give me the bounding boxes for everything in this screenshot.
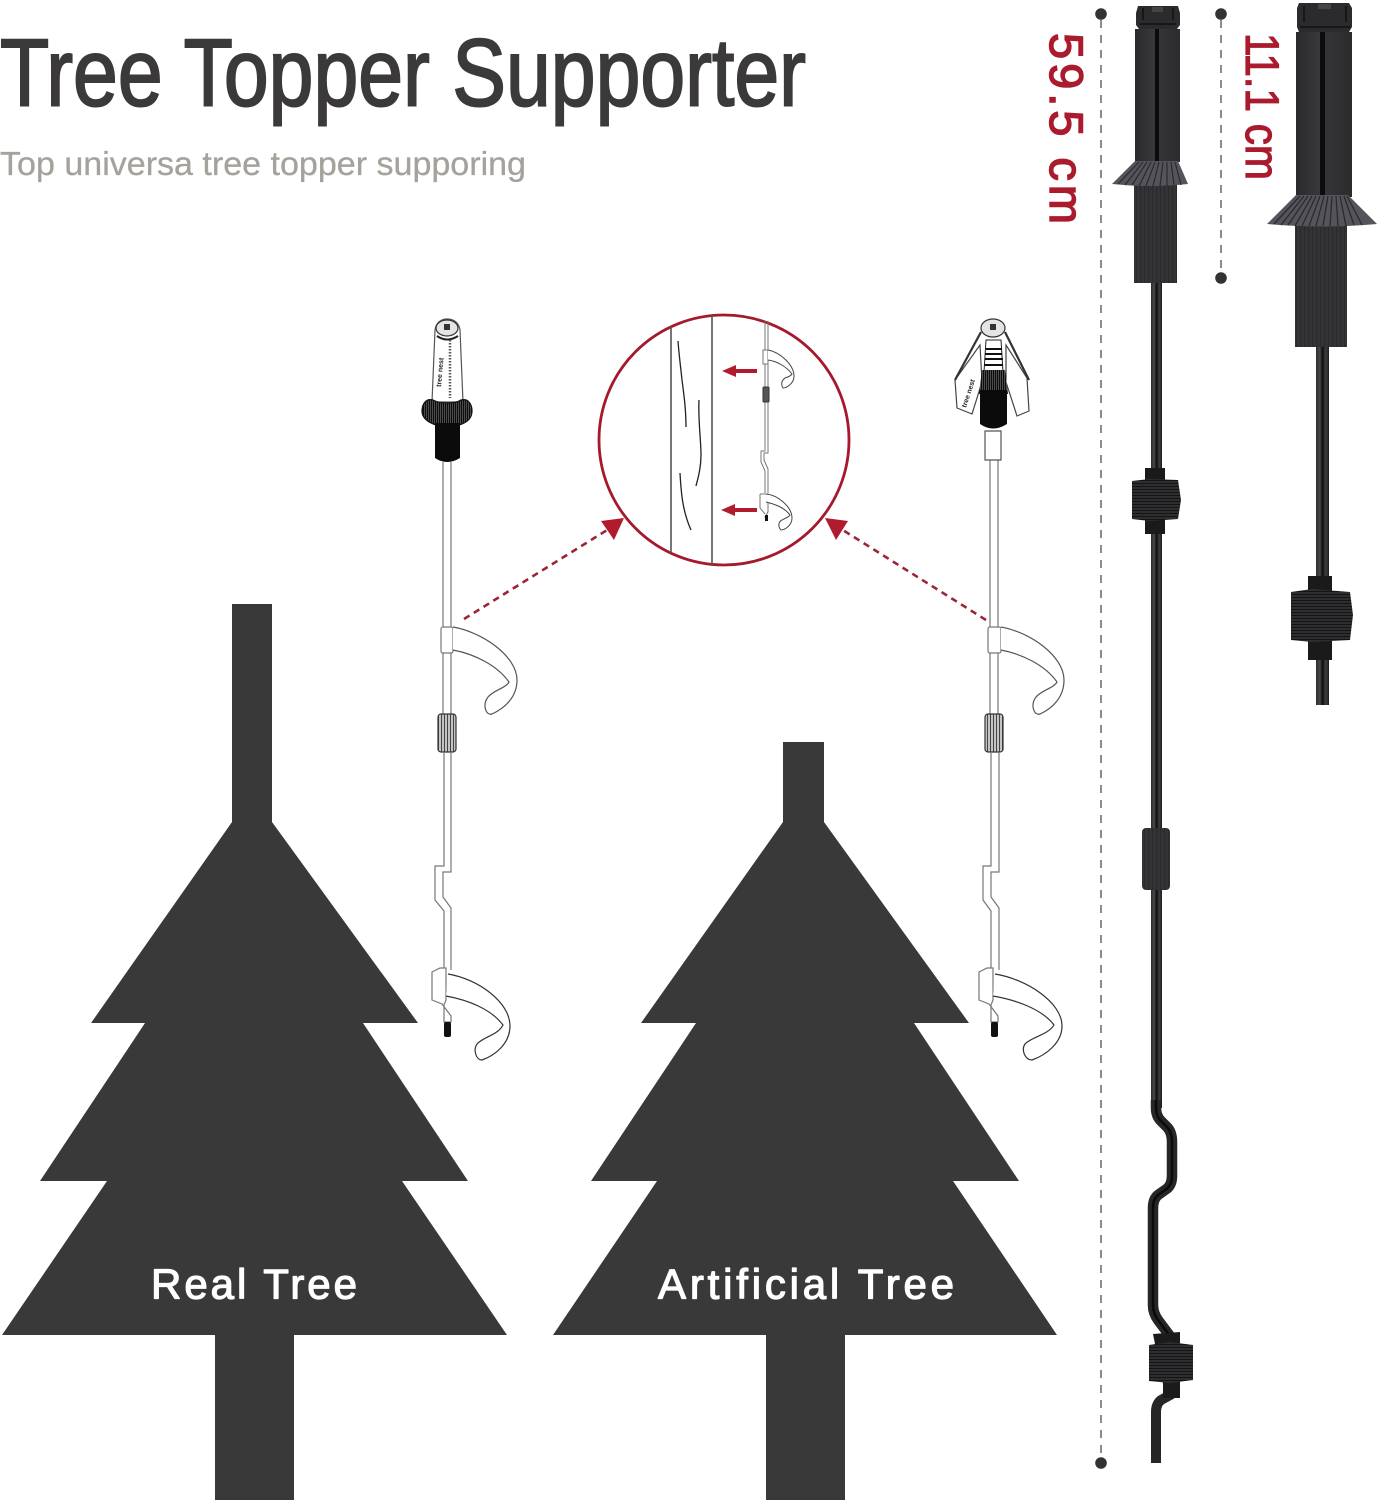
lower body	[1295, 222, 1347, 347]
open head with petals	[955, 319, 1029, 460]
real tree label: Real Tree	[151, 1260, 357, 1308]
title: Tree Topper Supporter	[0, 20, 806, 126]
bark marks	[678, 341, 701, 530]
upper shaft	[443, 462, 451, 715]
lower sleeve and tip	[979, 968, 998, 1037]
end rod	[1156, 1394, 1172, 1463]
red arrow lower	[721, 504, 757, 516]
upper body	[1135, 29, 1180, 162]
knurled nut	[985, 714, 1003, 752]
upper hook	[453, 627, 517, 714]
black product: close-up of head	[1267, 3, 1377, 705]
trunk outline	[671, 315, 712, 565]
upper sleeve	[988, 627, 1001, 653]
knurled nut	[438, 714, 456, 752]
clip	[1291, 576, 1353, 660]
59.5 cm label: 59.5 cm	[1040, 33, 1093, 224]
closed head: tree nest	[436, 357, 446, 387]
dashed arrow from right supporter	[825, 518, 986, 620]
lower hook	[993, 974, 1062, 1060]
magnified detail circle	[599, 315, 849, 565]
shaft	[1316, 347, 1329, 705]
real tree silhouette	[2, 604, 507, 1500]
upper shaft	[990, 460, 998, 715]
artificial tree label: Artificial Tree	[658, 1260, 954, 1308]
lower shaft with jog	[435, 752, 451, 970]
ribbed cone	[1267, 195, 1377, 226]
upper body	[1296, 32, 1352, 197]
sleeve	[1142, 828, 1170, 890]
bent shaft lower	[1153, 1100, 1172, 1336]
ribbed cone	[1112, 161, 1188, 186]
miniature supporter	[760, 321, 794, 530]
lower sleeve and tip	[432, 968, 451, 1037]
open head with petals: tree nest	[961, 378, 977, 409]
subtitle: Top universa tree topper supporing	[0, 145, 526, 182]
artificial tree silhouette	[553, 742, 1057, 1500]
black product: full supporter	[1112, 6, 1193, 1463]
lower shaft with jog	[983, 752, 999, 970]
line drawing: closed supporter on real tree	[422, 319, 517, 1060]
lower hook	[446, 974, 510, 1060]
clip two	[1149, 1332, 1193, 1398]
lower body	[1134, 182, 1177, 283]
clip one	[1132, 468, 1181, 534]
head cap	[1297, 3, 1352, 32]
shaft	[1151, 283, 1162, 1108]
upper hook	[1001, 627, 1064, 714]
red arrow upper	[722, 365, 757, 377]
upper sleeve	[441, 627, 453, 653]
dimension line 59.5 cm	[1040, 8, 1107, 1469]
line drawing: open supporter on artificial tree	[955, 319, 1064, 1060]
11.1 cm label: 11.1 cm	[1236, 33, 1289, 180]
closed head	[422, 319, 472, 462]
bent shaft shading	[1153, 1100, 1172, 1336]
dimension line 11.1 cm	[1215, 8, 1289, 284]
dashed arrow from left supporter	[464, 518, 624, 619]
head cap	[1136, 6, 1180, 29]
